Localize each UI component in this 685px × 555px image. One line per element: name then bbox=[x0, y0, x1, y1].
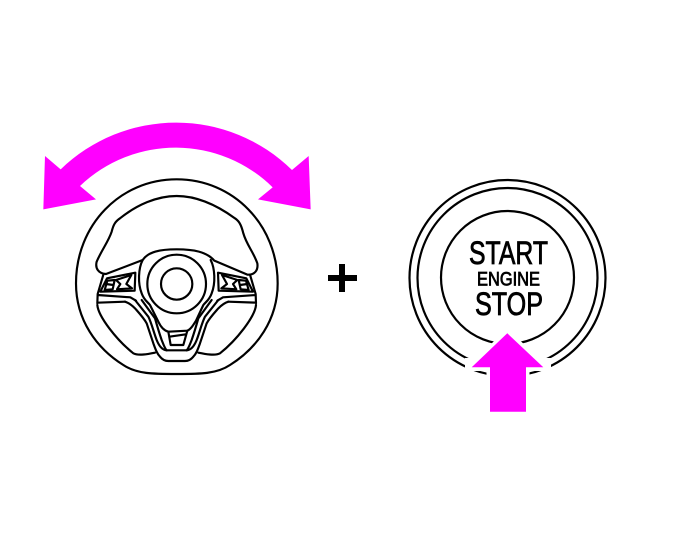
left switch detail bbox=[116, 275, 132, 289]
START label: START bbox=[469, 235, 548, 271]
emblem bbox=[168, 331, 187, 345]
button outer ring bbox=[410, 180, 606, 376]
icon: steering wheel bbox=[76, 179, 278, 374]
STOP label: STOP bbox=[475, 286, 543, 322]
icon: engine start stop button bbox=[410, 180, 606, 376]
spoke outer contour bbox=[125, 302, 228, 361]
left lower panel bbox=[97, 305, 155, 355]
right lower panel bbox=[198, 305, 256, 355]
hub outer ring bbox=[147, 255, 206, 313]
arrow: press button bbox=[465, 333, 551, 412]
hub inner circle bbox=[161, 268, 192, 300]
left small switch bbox=[105, 280, 115, 290]
spoke middle contour bbox=[135, 300, 218, 350]
right switch panel bbox=[218, 273, 253, 292]
left switch panel bbox=[100, 273, 135, 292]
plus sign bbox=[328, 264, 357, 292]
wheel rim bbox=[76, 179, 278, 374]
ENGINE label: ENGINE bbox=[477, 268, 540, 290]
left controls bbox=[97, 273, 155, 355]
spoke inner contour bbox=[142, 300, 212, 350]
right small switch bbox=[239, 280, 249, 290]
arrow: turn steering wheel left and right bbox=[43, 123, 311, 209]
right control pod bbox=[217, 275, 256, 303]
right switch detail bbox=[221, 275, 237, 289]
left control pod bbox=[97, 275, 136, 303]
hub outline bbox=[139, 260, 214, 332]
button inner ring bbox=[441, 211, 574, 344]
button middle ring bbox=[418, 188, 598, 368]
upper wheel opening bbox=[96, 196, 258, 275]
right controls bbox=[198, 273, 256, 355]
